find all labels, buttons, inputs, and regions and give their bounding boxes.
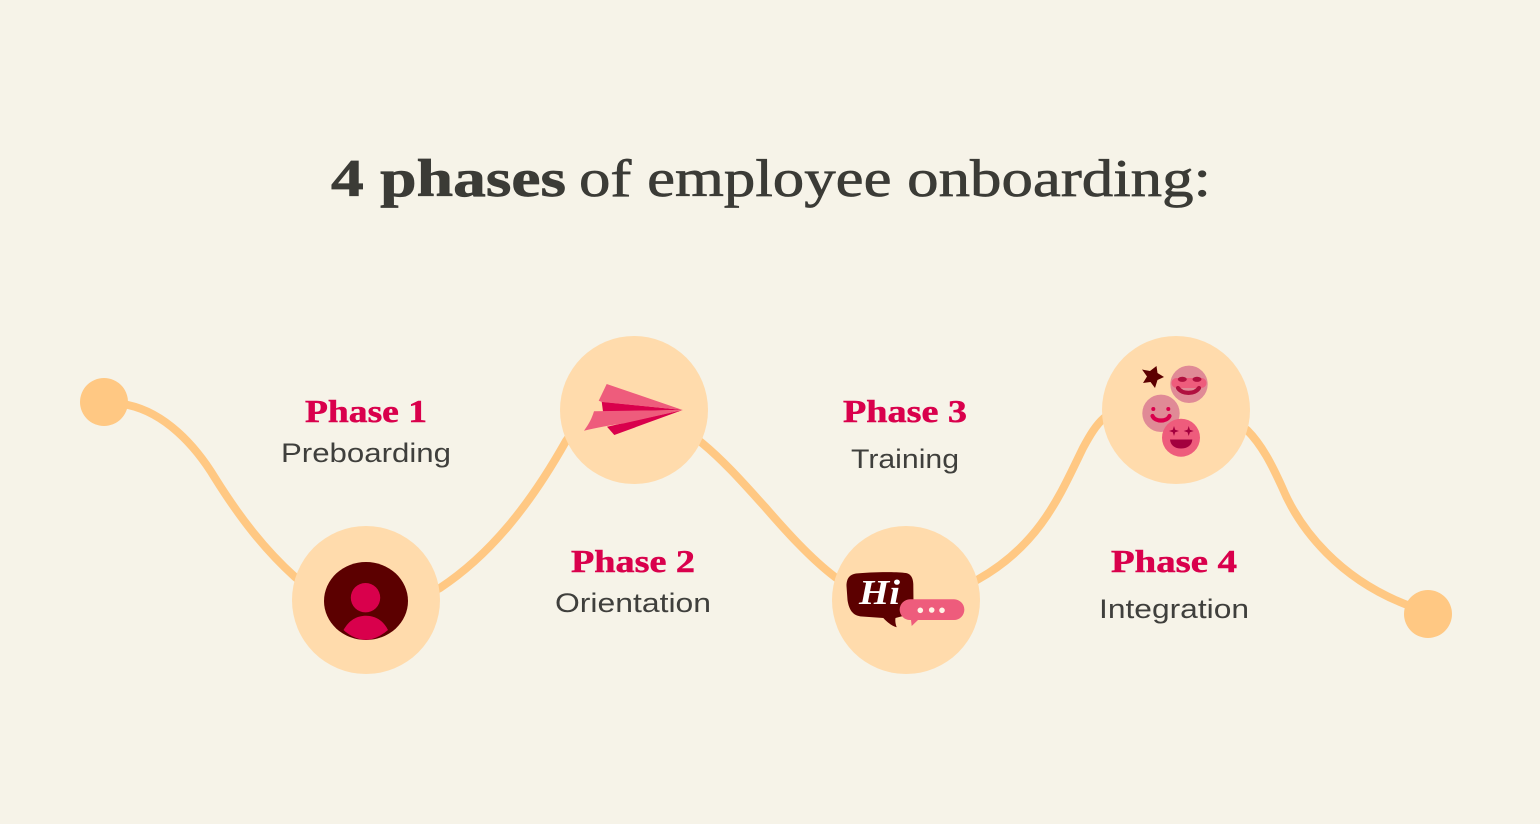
title [331,150,1211,208]
wavy timeline path [104,402,1428,614]
icon: chat bubbles: Hi [858,573,900,612]
label: phase 1: Preboarding [281,438,451,468]
label: phase 1: Phase 1 [305,393,427,429]
circle: phase 1 [292,526,440,674]
label: phase 4: Integration [1099,594,1249,624]
label: phase 4 [1099,543,1249,624]
label: phase 3 [843,393,967,474]
label: phase 1 [281,393,451,468]
face: bottom [1162,419,1200,457]
label: phase 4: Phase 4 [1111,543,1237,579]
label: phase 2 [555,543,711,618]
icon: smiling faces and star [1142,366,1208,457]
circle: phase 2 [560,336,708,484]
start dot [80,378,128,426]
face: top right [1170,366,1208,403]
label: phase 2: Orientation [555,588,711,618]
star [1142,366,1164,388]
label: phase 2: Phase 2 [571,543,695,579]
circle: phase 3 [832,526,980,674]
end dot [1404,590,1452,638]
icon: chat bubbles [846,572,964,627]
icon: paper plane [584,384,683,435]
title: 4 phases [331,150,566,208]
circle: phase 4 [1102,336,1250,484]
label: phase 3: Phase 3 [843,393,967,429]
title: of employee onboarding: [579,150,1211,208]
icon: person avatar [324,562,408,640]
label: phase 3: Training [851,444,959,474]
face: middle left [1142,395,1180,432]
